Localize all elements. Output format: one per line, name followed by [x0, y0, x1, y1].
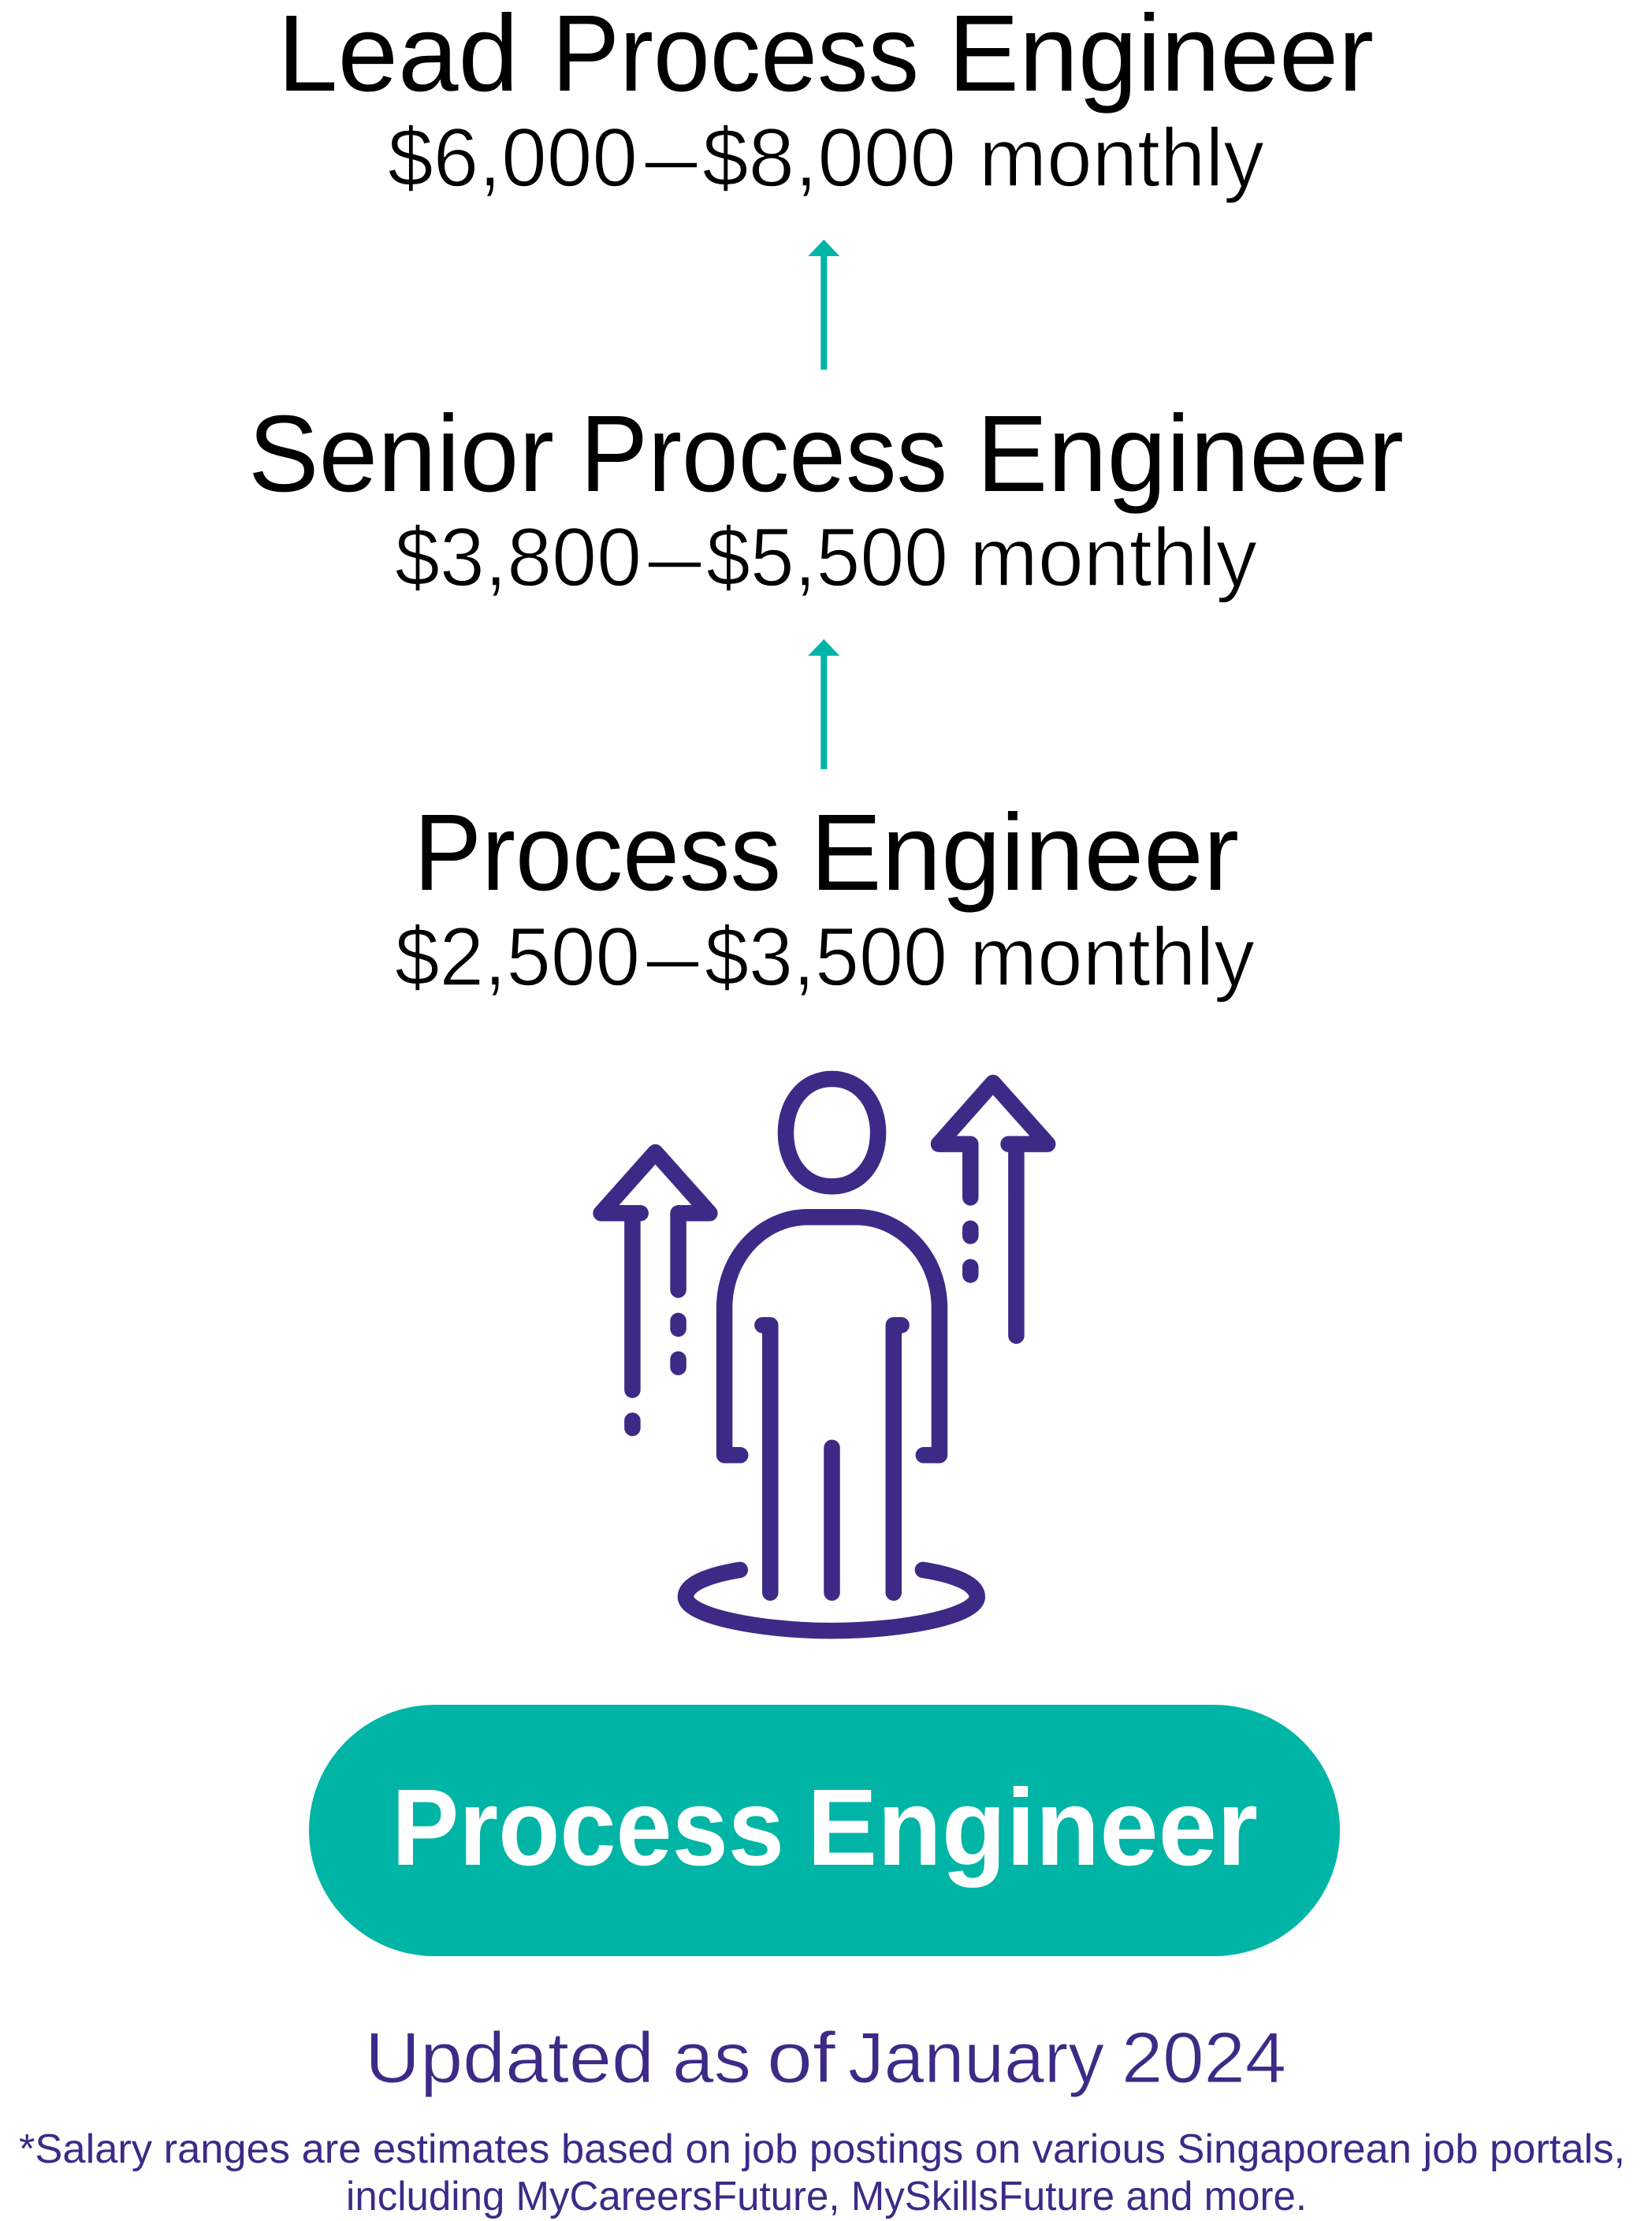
ground ring — [686, 1570, 977, 1631]
role pill: Engineer — [807, 1767, 1258, 1888]
salary: process engineer: $3,500 — [705, 911, 947, 1003]
salary: lead: $6,000 — [388, 112, 638, 204]
salary: senior — [395, 512, 1257, 604]
update date: 2024 — [1122, 2018, 1286, 2098]
salary: lead — [388, 112, 1264, 204]
salary: lead: monthly — [979, 112, 1264, 204]
update date — [365, 2018, 1286, 2098]
footnote: *Salary ranges are estimates based on job postings on various Singaporean job portals, — [19, 2126, 1625, 2172]
update date: January — [848, 2018, 1104, 2098]
role pill — [309, 1705, 1340, 1956]
salary: senior: monthly — [969, 512, 1257, 604]
salary: process engineer: – — [646, 911, 700, 1003]
salary: senior: – — [648, 512, 702, 604]
right arrow — [939, 1083, 1047, 1336]
update date: as — [672, 2018, 751, 2098]
arrow: senior to lead — [808, 240, 839, 370]
head — [786, 1079, 878, 1186]
job title: Process Engineer — [414, 792, 1239, 913]
body and arms — [724, 1217, 939, 1455]
footnote: including MyCareersFuture, MySkillsFuture and more. — [346, 2174, 1307, 2219]
job title: Senior Process Engineer: Engineer — [977, 393, 1404, 515]
salary: process engineer: $2,500 — [395, 911, 640, 1003]
icon: person with rising arrows — [601, 1079, 1047, 1631]
salary: senior: $3,800 — [395, 512, 642, 604]
salary: process engineer — [395, 911, 1255, 1003]
job title: Senior Process Engineer: Senior — [248, 393, 554, 515]
role pill: Process — [392, 1767, 784, 1888]
job title: Lead Process Engineer — [277, 0, 1374, 114]
left arrow — [601, 1152, 709, 1428]
footnote — [19, 2126, 1625, 2219]
salary: process engineer: monthly — [969, 911, 1255, 1003]
legs — [762, 1325, 902, 1593]
job title: Process Engineer: Engineer — [810, 792, 1239, 913]
salary: lead: $8,000 — [702, 112, 956, 204]
salary: lead: – — [645, 112, 698, 204]
arrow: process to senior — [808, 639, 839, 769]
job title: Senior Process Engineer: Process — [580, 393, 947, 515]
job title: Senior Process Engineer — [248, 393, 1404, 515]
update date: of — [767, 2018, 836, 2098]
update date: Updated — [365, 2018, 654, 2098]
salary: senior: $5,500 — [706, 512, 948, 604]
job title: Process Engineer: Process — [414, 792, 781, 913]
